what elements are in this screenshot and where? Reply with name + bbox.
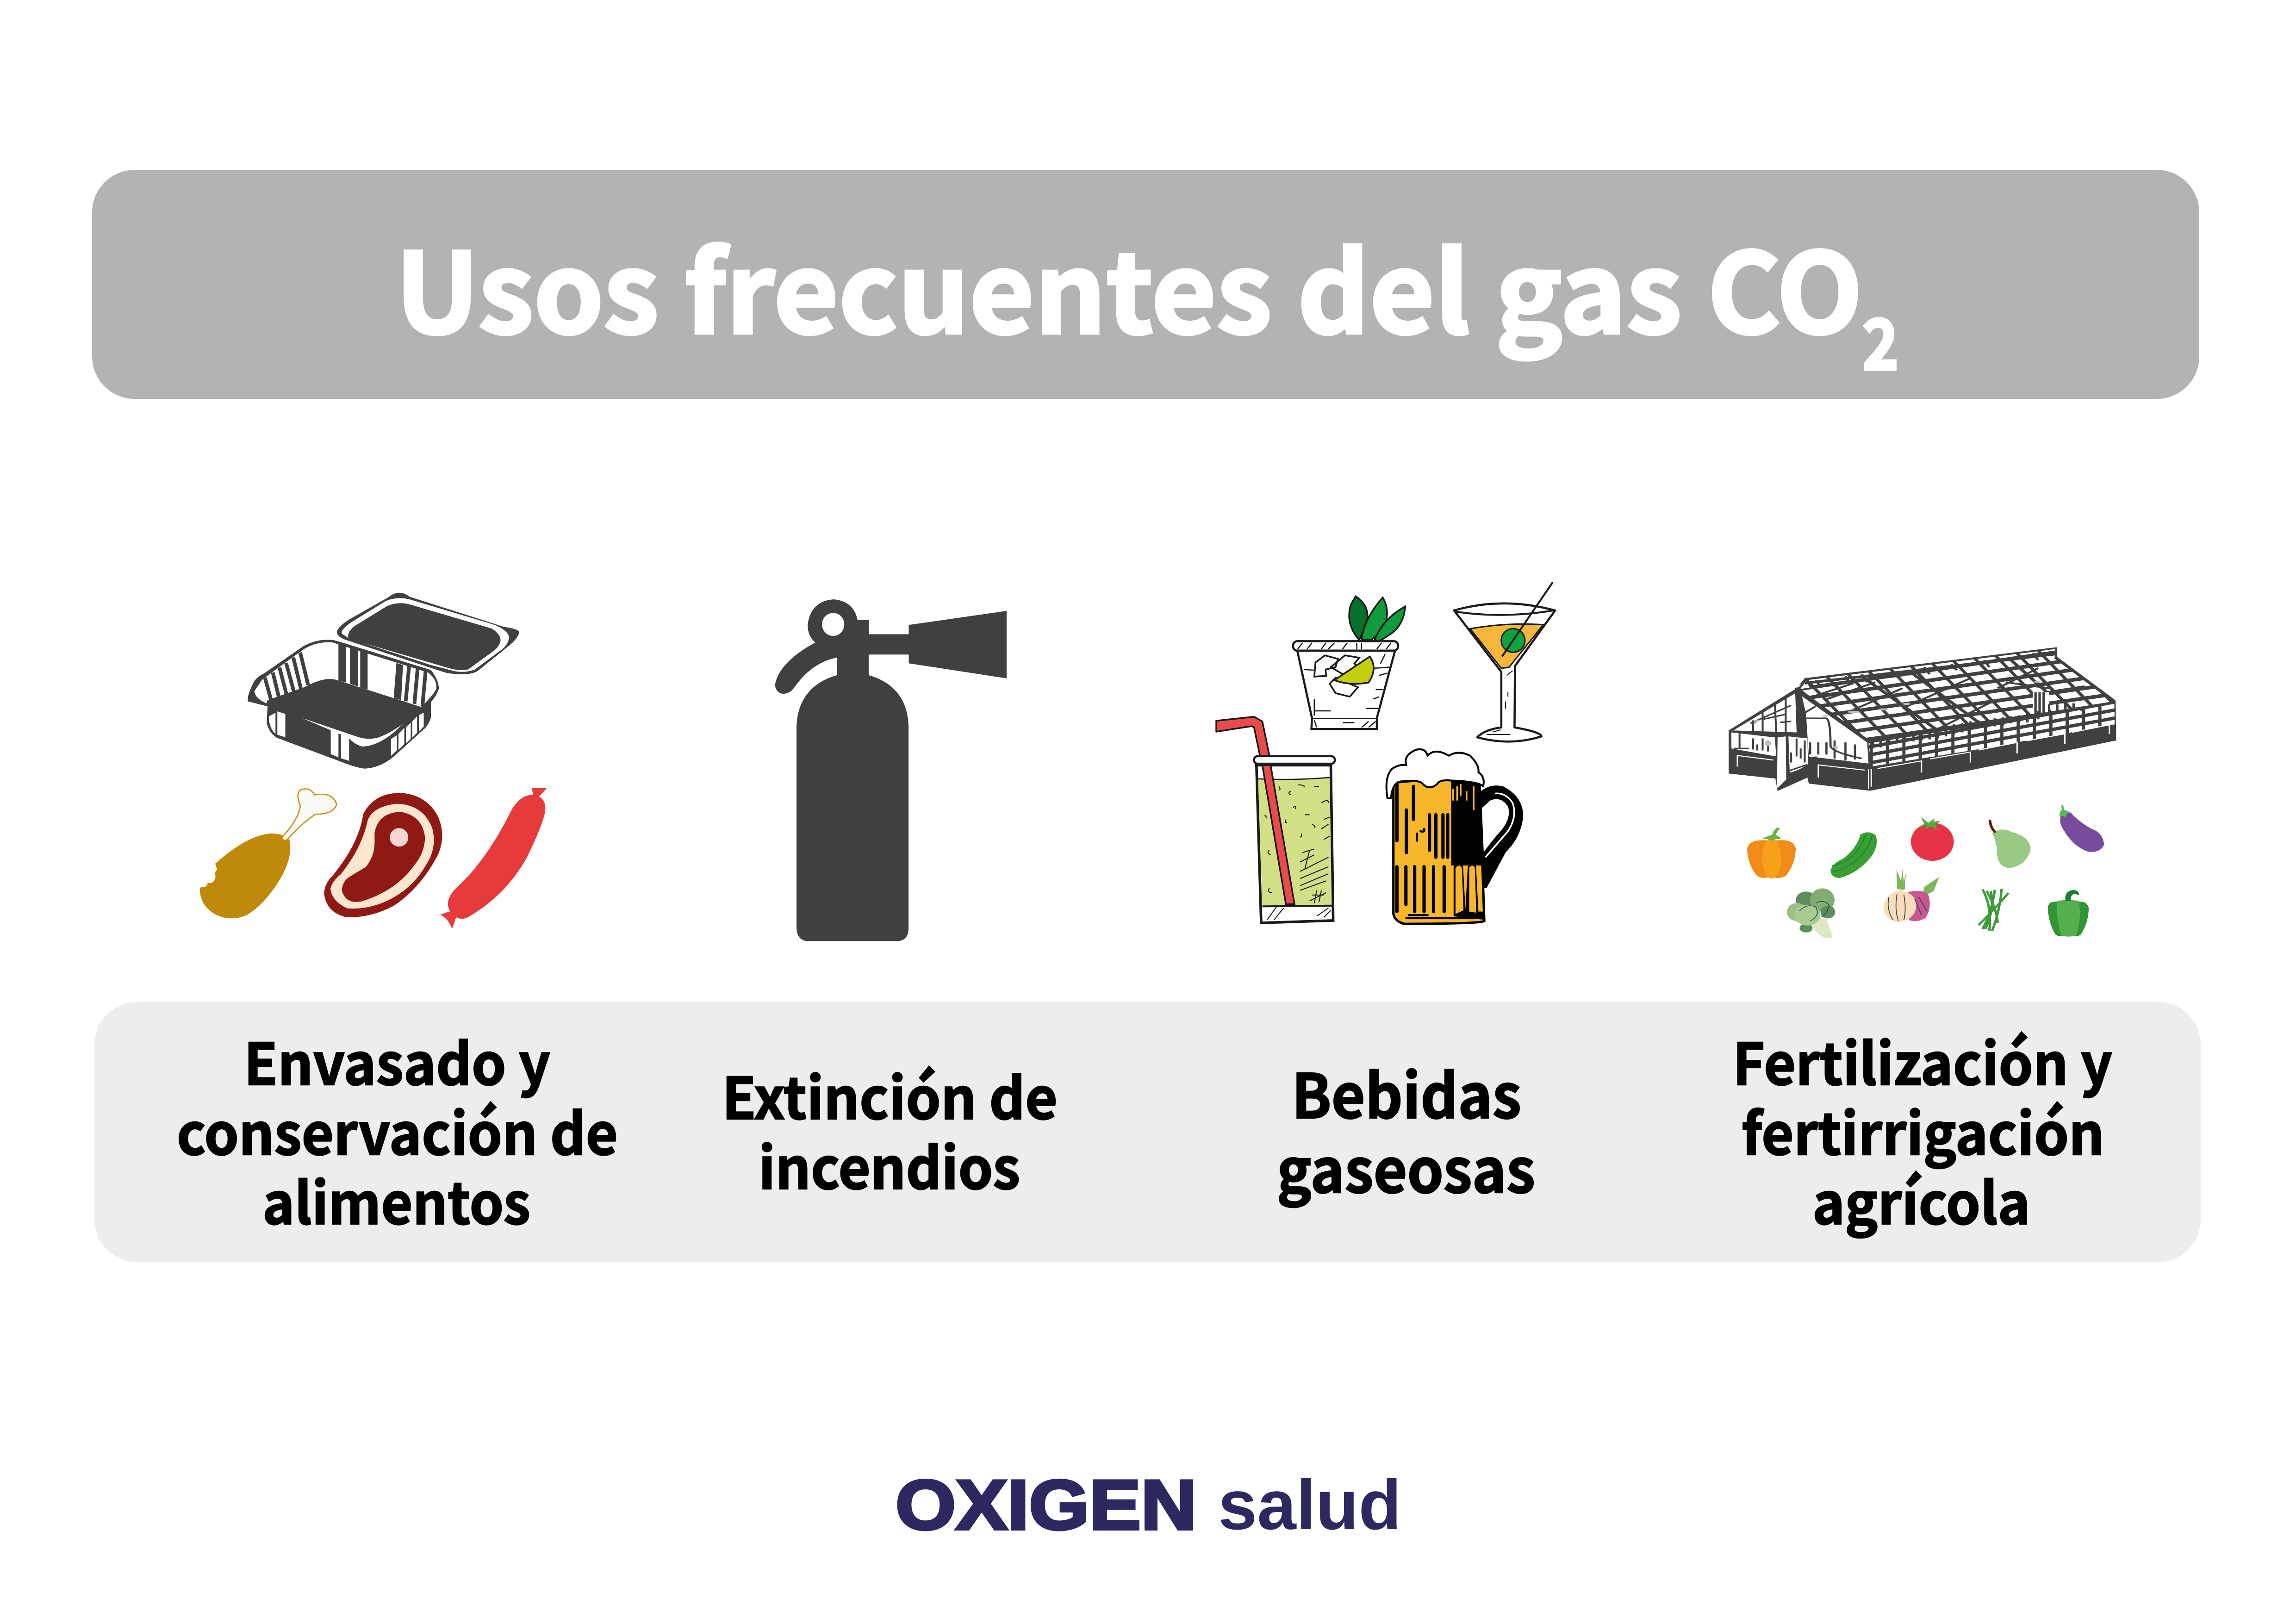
label: envasado: conservación de: [177, 1088, 618, 1171]
label: bebidas: Bebidas: [1292, 1048, 1521, 1136]
logo: OXIGEN salud: OXIGEN: [896, 1466, 1197, 1544]
label: extincion: Extinción de: [722, 1052, 1058, 1136]
label: envasado: [177, 1018, 618, 1241]
label: bebidas: [1277, 1048, 1535, 1211]
icon: drinks: [1216, 582, 1555, 924]
label: fertilizacion: fertirrigación: [1742, 1088, 2104, 1171]
label: extincion: [722, 1052, 1058, 1206]
mint leaves: [1349, 596, 1405, 641]
label: fertilizacion: Fertilización y: [1733, 1018, 2112, 1101]
label: fertilizacion: agrícola: [1812, 1157, 2030, 1241]
label: extincion: incendios: [759, 1122, 1020, 1206]
title banner: 2: [1862, 289, 1898, 390]
labels panel: [94, 1002, 2201, 1262]
label: fertilizacion: [1733, 1018, 2112, 1241]
title banner: [92, 170, 2199, 399]
title banner: Usos frecuentes del gas CO: [395, 205, 1863, 366]
label: bebidas: gaseosas: [1277, 1122, 1535, 1211]
label: envasado: alimentos: [262, 1157, 530, 1241]
icon: fire extinguisher: [775, 599, 1007, 941]
label: envasado: Envasado y: [244, 1018, 550, 1101]
logo: OXIGEN salud: salud: [1218, 1466, 1401, 1544]
icon: food container and meats: [200, 593, 547, 929]
logo: OXIGEN salud: [896, 1466, 1401, 1544]
icon: greenhouse and vegetables: [1729, 647, 2116, 939]
